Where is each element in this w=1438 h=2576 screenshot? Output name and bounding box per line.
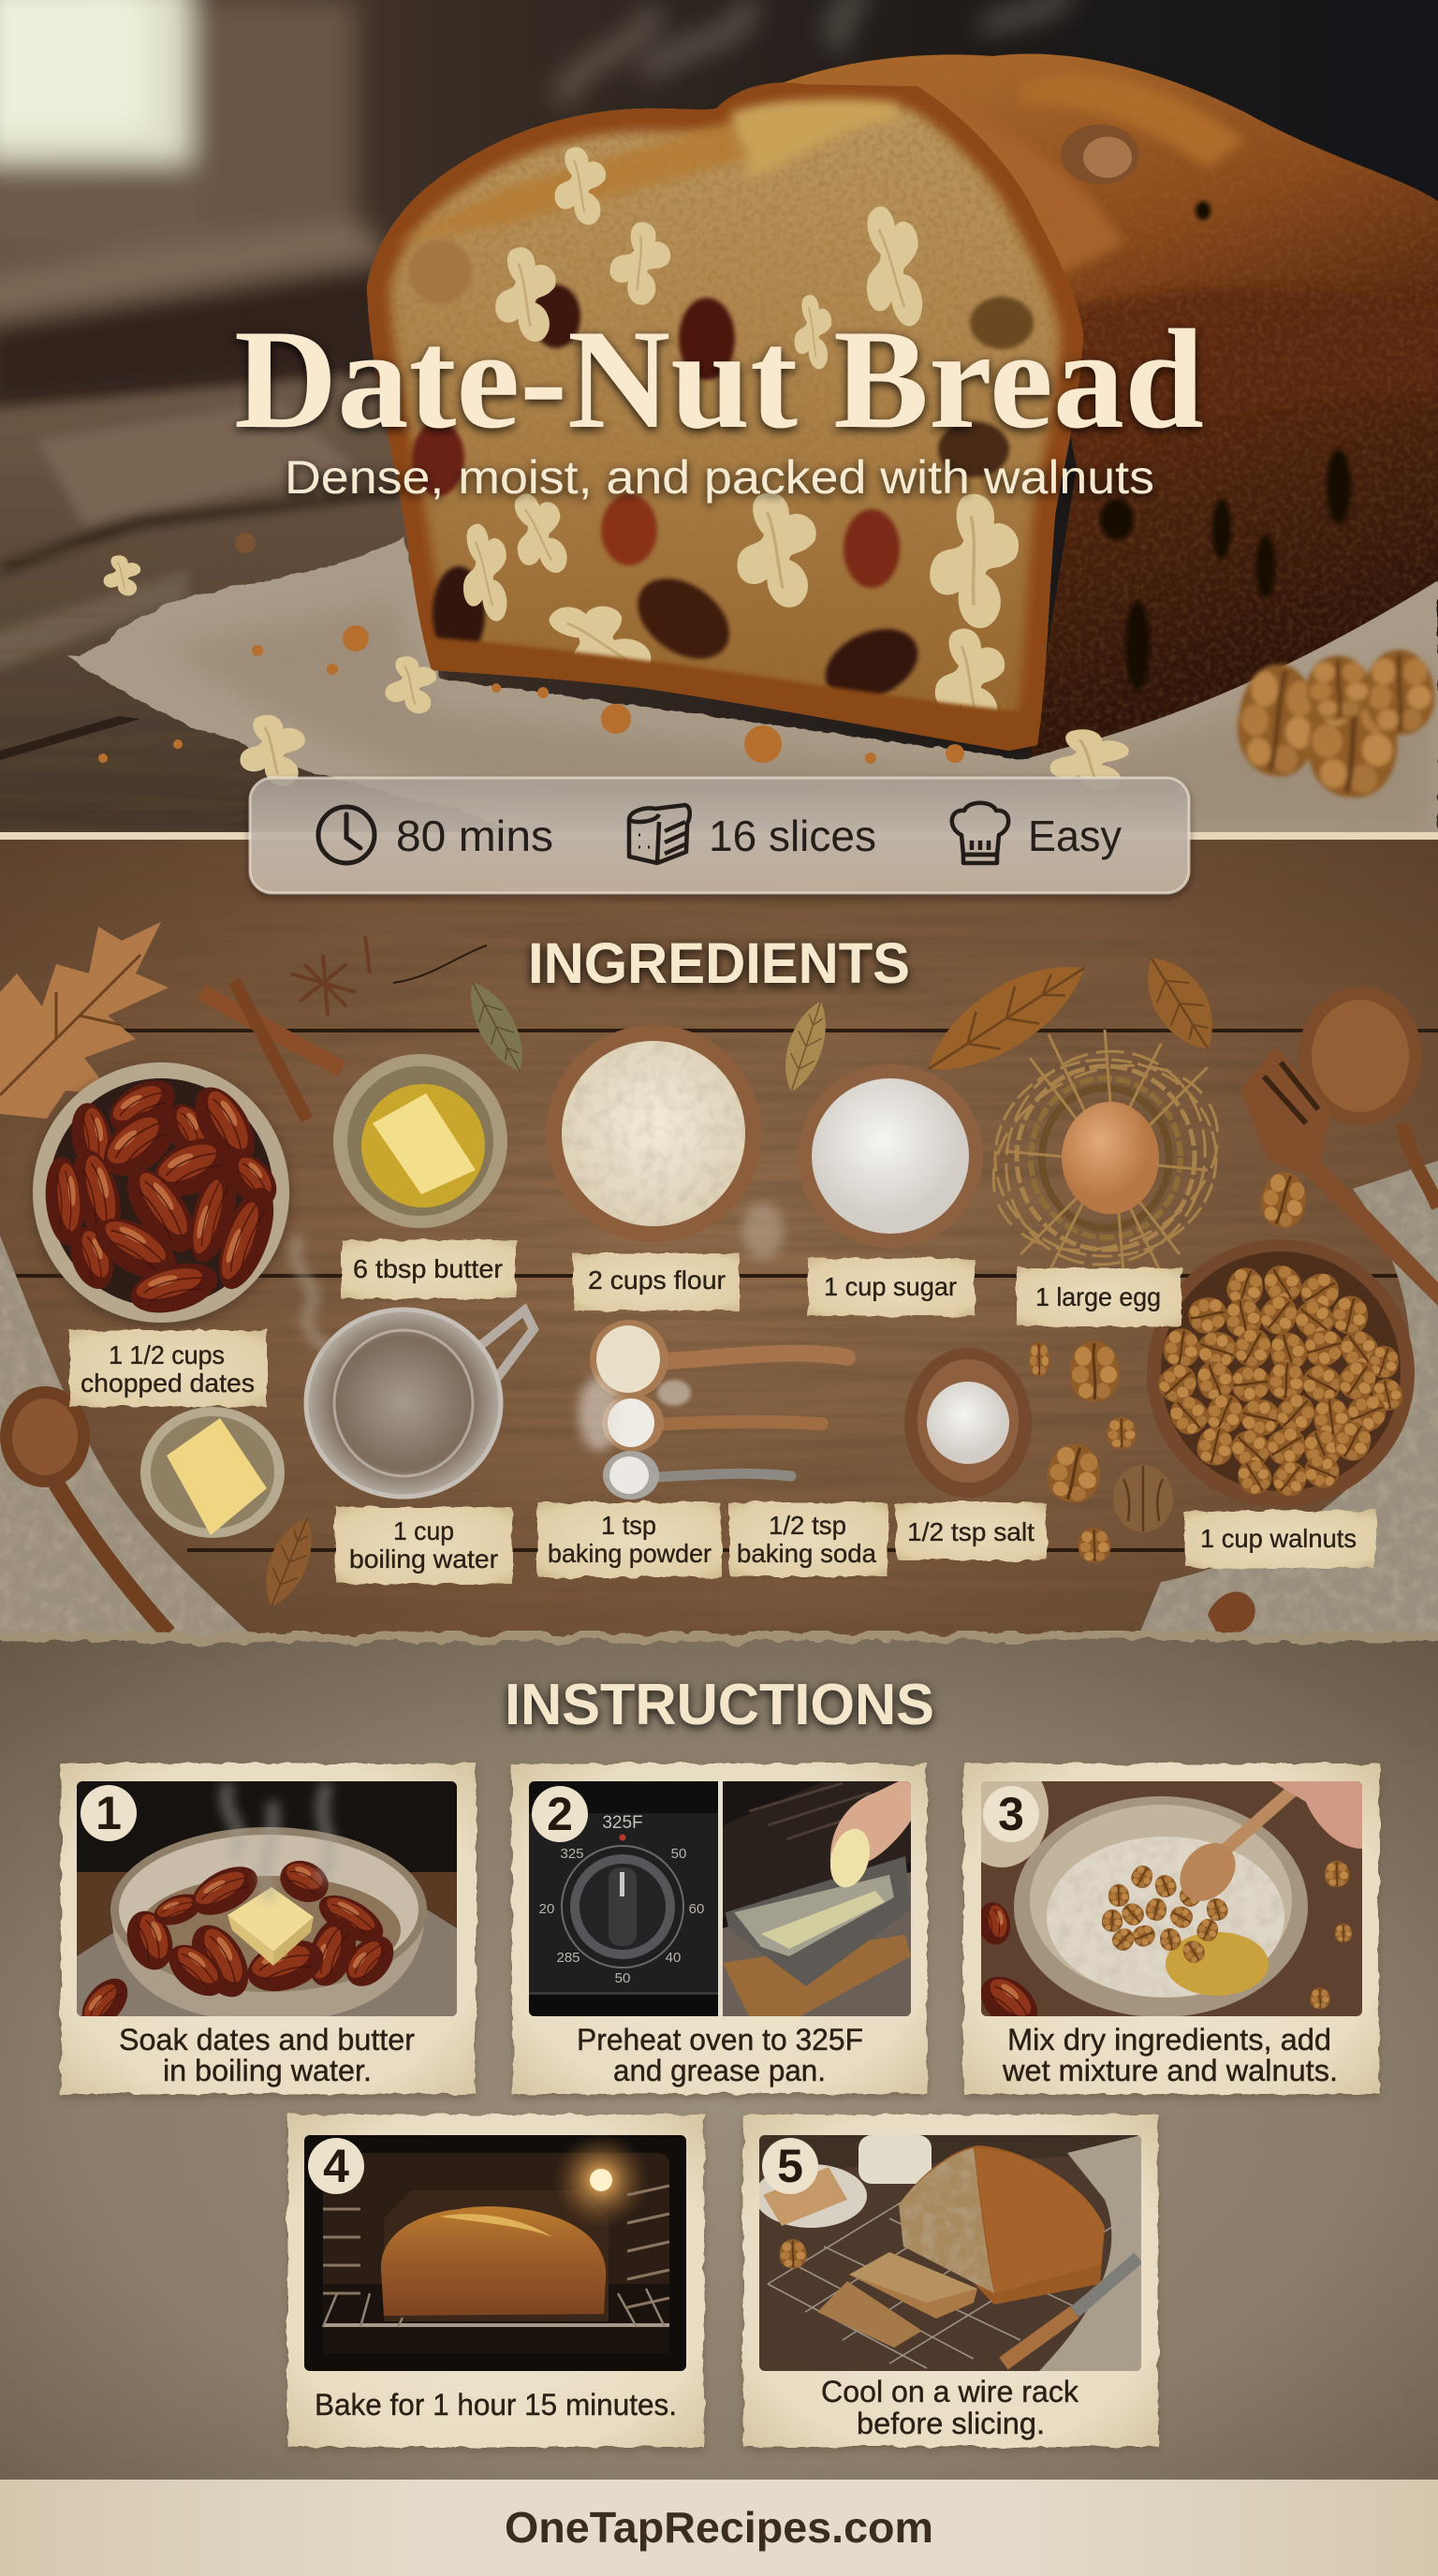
icon: cinnamon sticks bbox=[201, 981, 342, 1120]
loose walnuts bbox=[1029, 1340, 1255, 1634]
ingredient labels bbox=[69, 1240, 1375, 1584]
caption bbox=[119, 2023, 415, 2087]
label: dates bbox=[69, 1330, 267, 1407]
ingredient: salt bowl bbox=[904, 1348, 1032, 1498]
caption: Cool on a wire rack bbox=[821, 2375, 1079, 2408]
instructions panel bbox=[0, 1632, 1438, 2487]
caption: Bake for 1 hour 15 minutes. bbox=[315, 2388, 677, 2422]
photo: oven dial and greased pan: 285 bbox=[556, 1950, 580, 1966]
step number 5 bbox=[762, 2138, 818, 2194]
ingredient: walnut bowl bbox=[1147, 1239, 1415, 1507]
loaf cut face with nuts and dates bbox=[356, 75, 1105, 758]
photo: oven dial and greased pan: 60 bbox=[689, 1901, 704, 1917]
steam above the glass bbox=[295, 1236, 337, 1353]
label: salt bbox=[896, 1502, 1047, 1560]
loaf side and crust bbox=[768, 47, 1438, 768]
utensils: wooden fork and spoon bbox=[1240, 987, 1438, 1306]
caption: before slicing. bbox=[857, 2407, 1045, 2440]
ingredient: butter dish bbox=[140, 1407, 285, 1538]
label: baking powder: 1 tsp bbox=[601, 1511, 656, 1540]
step number 1 bbox=[81, 1785, 137, 1841]
label: flour: 2 cups flour bbox=[588, 1266, 726, 1295]
photo: oven dial and greased pan: 325F bbox=[602, 1813, 643, 1833]
label: boiling water: 1 cup bbox=[393, 1516, 454, 1545]
icon: chef hat bbox=[952, 803, 1008, 863]
photo: loaf baking in oven bbox=[304, 2131, 686, 2371]
label: boiling water: boiling water bbox=[349, 1544, 498, 1573]
photo: oven dial and greased pan: 50 bbox=[671, 1846, 686, 1862]
cloth napkins bbox=[0, 1161, 1438, 1638]
ingredient: sugar bowl bbox=[798, 1064, 983, 1248]
label: egg: 1 large egg bbox=[1035, 1282, 1161, 1311]
ingredient: egg in straw nest bbox=[963, 1023, 1248, 1293]
time: 80 mins bbox=[396, 812, 553, 860]
caption: and grease pan. bbox=[613, 2054, 826, 2087]
caption: in boiling water. bbox=[163, 2054, 372, 2087]
ingredient: chopped dates bowl bbox=[32, 1062, 290, 1327]
utensil: wooden spoon bbox=[0, 1386, 169, 1633]
step number 2: 2 bbox=[547, 1788, 573, 1840]
label: dates: chopped dates bbox=[81, 1368, 255, 1398]
photo: loaf cooling on wire rack bbox=[755, 2135, 1141, 2371]
label: dates: 1 1/2 cups bbox=[109, 1340, 225, 1369]
slices count: 16 slices bbox=[709, 812, 876, 860]
difficulty: Easy bbox=[1028, 812, 1122, 860]
steam bbox=[562, 0, 1067, 103]
ingredient: melted butter bowl bbox=[333, 1054, 507, 1228]
section heading: ingredients: INGREDIENTS bbox=[528, 931, 910, 995]
step card 3 bbox=[955, 1755, 1379, 2094]
label: salt: 1/2 tsp salt bbox=[907, 1517, 1034, 1546]
label: walnuts: 1 cup walnuts bbox=[1200, 1524, 1357, 1553]
icon: bread loaf bbox=[629, 805, 690, 863]
hero title: Date-Nut Bread bbox=[234, 300, 1204, 458]
label: baking powder: baking powder bbox=[548, 1539, 712, 1568]
footer band bbox=[0, 2480, 1438, 2576]
step card 2 bbox=[512, 1764, 927, 2094]
photo: oven dial and greased pan bbox=[529, 1781, 911, 2016]
ingredient: flour bowl bbox=[546, 1025, 761, 1242]
label: baking soda bbox=[729, 1502, 888, 1576]
label: walnuts bbox=[1184, 1511, 1375, 1568]
label: sugar: 1 cup sugar bbox=[824, 1272, 957, 1301]
walnuts and crumbs on the table bbox=[98, 533, 1434, 805]
icon: spice cluster bbox=[290, 936, 370, 1016]
caption: Soak dates and butter bbox=[119, 2023, 415, 2056]
caption: wet mixture and walnuts. bbox=[1002, 2054, 1338, 2087]
footer band: OneTapRecipes.com bbox=[505, 2503, 933, 2552]
step number 1: 1 bbox=[95, 1787, 122, 1839]
label: baking soda: baking soda bbox=[737, 1539, 876, 1568]
step number 3 bbox=[983, 1786, 1039, 1842]
label: sugar bbox=[808, 1258, 975, 1316]
step number 4 bbox=[308, 2138, 364, 2194]
icon: clock bbox=[318, 807, 374, 863]
hero subtitle: Dense, moist, and packed with walnuts bbox=[285, 451, 1154, 504]
photo: oven dial and greased pan: 50 bbox=[615, 1970, 630, 1986]
step card 5 bbox=[743, 2115, 1158, 2447]
section heading: instructions: INSTRUCTIONS bbox=[505, 1673, 934, 1737]
label: boiling water bbox=[335, 1507, 512, 1584]
caption bbox=[1002, 2023, 1338, 2087]
step number 5: 5 bbox=[777, 2140, 803, 2192]
label: baking soda: 1/2 tsp bbox=[769, 1511, 846, 1540]
icon: oak leaf bbox=[0, 922, 169, 1119]
label: baking powder bbox=[538, 1502, 721, 1577]
icon: scattered leaves bbox=[254, 942, 1230, 1613]
caption: Mix dry ingredients, add bbox=[1007, 2023, 1331, 2056]
hero photo panel: date-nut loaf on rustic table bbox=[0, 0, 1438, 836]
ingredients panel: wooden table flat-lay bbox=[0, 832, 1438, 1647]
cloth under the loaf bbox=[66, 538, 1438, 836]
label: flour bbox=[573, 1253, 739, 1310]
step card 1 bbox=[61, 1764, 476, 2094]
step card 4 bbox=[287, 2115, 704, 2447]
label: butter: 6 tbsp butter bbox=[353, 1254, 503, 1283]
step number 3: 3 bbox=[998, 1788, 1024, 1840]
label: butter bbox=[342, 1240, 516, 1298]
photo: oven dial and greased pan: 20 bbox=[539, 1901, 554, 1917]
caption bbox=[821, 2375, 1079, 2440]
photo: oven dial and greased pan: 325 bbox=[560, 1846, 584, 1862]
ingredient: glass of boiling water bbox=[306, 1310, 534, 1497]
photo: dates soaking in a bowl bbox=[73, 1781, 457, 2036]
stats pill bbox=[250, 778, 1189, 893]
photo: oven dial and greased pan: 40 bbox=[666, 1950, 681, 1966]
caption bbox=[577, 2023, 863, 2087]
step number 4: 4 bbox=[323, 2140, 349, 2192]
photo: mixing bowl with walnuts bbox=[955, 1755, 1362, 2041]
caption: Preheat oven to 325F bbox=[577, 2023, 863, 2056]
step number 2 bbox=[532, 1786, 588, 1842]
label: egg bbox=[1017, 1267, 1181, 1326]
ingredient: measuring spoons bbox=[579, 1203, 847, 1500]
